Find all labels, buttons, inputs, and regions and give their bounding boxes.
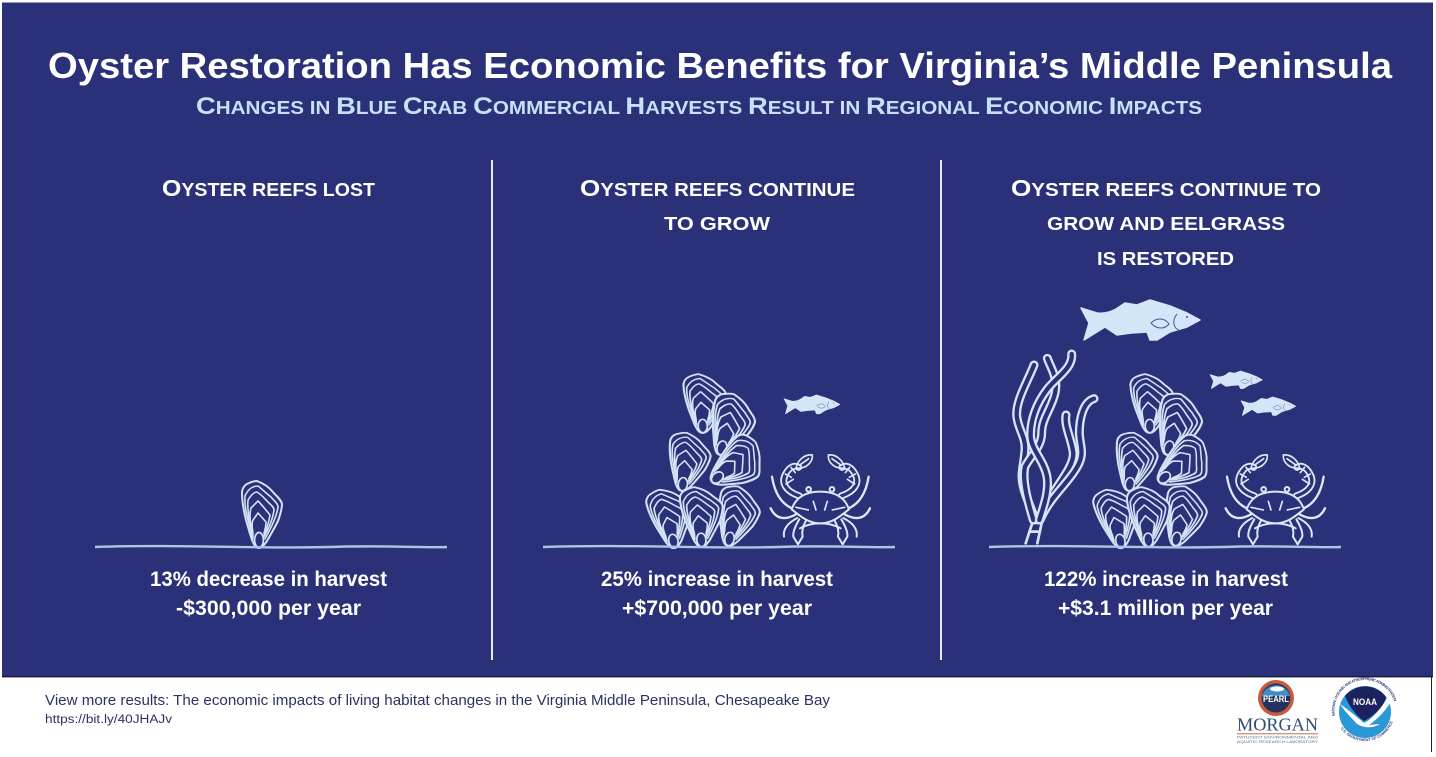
icon: small fish upper xyxy=(1210,371,1262,389)
icon: oyster stack xyxy=(644,373,773,552)
heading: reefs grow and eelgrass restored: IS RESTORED xyxy=(1097,248,1234,269)
harvest increase text xyxy=(601,568,833,620)
title: Oyster Restoration Has Economic Benefits for Virginia’s Middle Peninsula xyxy=(48,45,1393,86)
icon: blue crab xyxy=(1226,455,1325,544)
footer text: https://bit.ly/40JHAJv xyxy=(45,714,172,726)
panel: oyster reefs continue to grow xyxy=(543,175,895,620)
harvest decrease text: 13% decrease in harvest xyxy=(150,568,387,591)
seabed line xyxy=(989,546,1341,547)
panel: oyster reefs grow and eelgrass restored xyxy=(989,175,1341,620)
logo: PEARL Morgan: MORGAN xyxy=(1237,714,1318,734)
icon: blue crab xyxy=(771,455,870,544)
harvest decrease text: -$300,000 per year xyxy=(176,597,361,620)
heading: reefs grow and eelgrass restored: OYSTER REEFS CONTINUE TO xyxy=(1011,175,1321,201)
heading: oyster reefs lost: OYSTER REEFS LOST xyxy=(162,175,376,201)
seabed line xyxy=(543,546,895,547)
heading: oyster reefs continue to grow: TO GROW xyxy=(664,213,771,234)
heading: oyster reefs continue to grow: OYSTER REEFS CONTINUE xyxy=(580,175,855,201)
harvest increase text: 25% increase in harvest xyxy=(601,568,833,591)
logo: NOAA xyxy=(1332,678,1396,742)
logo: NOAA: U.S. DEPARTMENT OF COMMERCE xyxy=(1341,720,1393,742)
logo: PEARL Morgan xyxy=(1237,680,1318,744)
icon: fish xyxy=(784,395,840,414)
logo: PEARL Morgan: AQUATIC RESEARCH LABORATORY xyxy=(1237,739,1318,744)
logo: NOAA: NOAA xyxy=(1353,697,1377,707)
harvest increase text: +$700,000 per year xyxy=(622,597,812,620)
logo: PEARL Morgan: PATUXENT ENVIRONMENTAL AND xyxy=(1237,734,1318,740)
heading: oyster reefs continue to grow xyxy=(580,175,855,234)
icon: large fish xyxy=(1081,300,1200,340)
seabed line xyxy=(95,546,447,547)
harvest increase text: +$3.1 million per year xyxy=(1058,597,1273,620)
icon: eelgrass xyxy=(1017,354,1094,543)
panel: oyster reefs lost xyxy=(95,175,447,620)
icon: small fish lower xyxy=(1241,397,1296,415)
logo: NOAA: NATIONAL OCEANIC AND ATMOSPHERIC ADMINISTRATION xyxy=(1332,678,1396,716)
icon: single oyster xyxy=(242,481,282,548)
footer text xyxy=(45,693,831,726)
icon: oyster stack xyxy=(1091,373,1220,552)
heading: reefs grow and eelgrass restored: GROW AND EELGRASS xyxy=(1047,213,1285,234)
logo: PEARL Morgan: PEARL xyxy=(1263,694,1289,704)
subtitle: CHANGES IN BLUE CRAB COMMERCIAL HARVESTS RESULT IN REGIONAL ECONOMIC IMPACTS xyxy=(196,93,1202,120)
footer text: View more results: The economic impacts of living habitat changes in the Virginia Middle Peninsula, Chesapeake Bay xyxy=(45,693,831,709)
harvest increase text: 122% increase in harvest xyxy=(1044,568,1288,591)
harvest decrease text xyxy=(150,568,387,620)
harvest increase text xyxy=(1044,568,1288,620)
heading: reefs grow and eelgrass restored xyxy=(1011,175,1321,269)
